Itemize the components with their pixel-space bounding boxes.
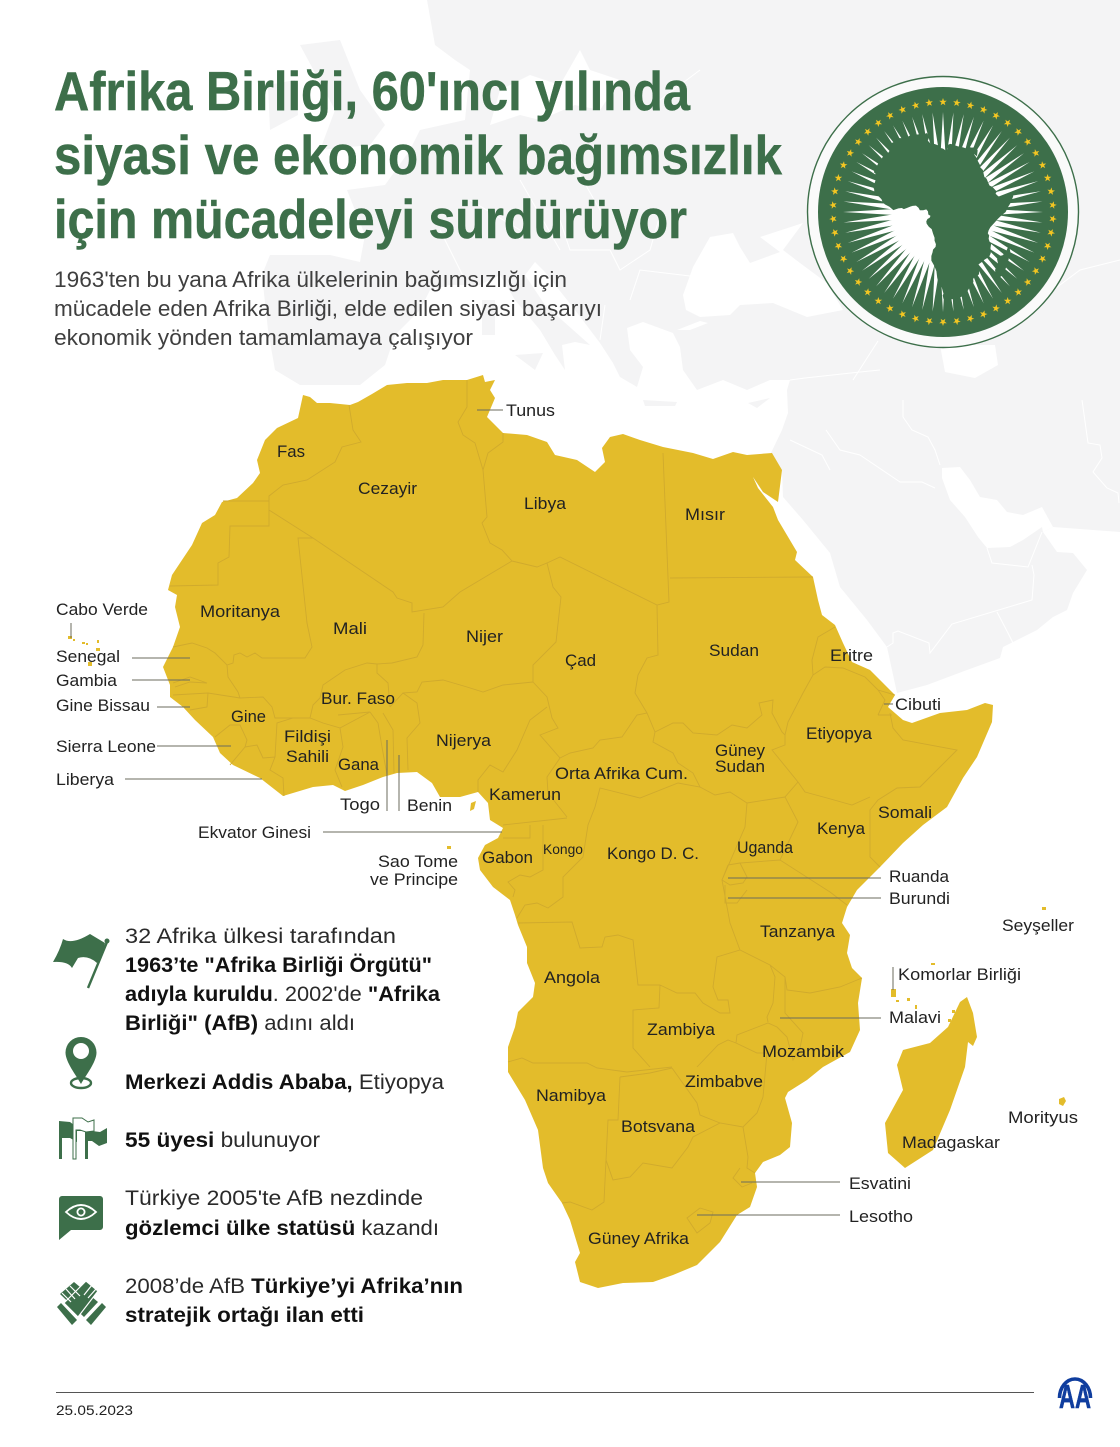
label: Sierra Leone: Sierra Leone bbox=[56, 737, 156, 756]
label: Senegal: Senegal bbox=[56, 647, 120, 666]
label: Mali: Mali bbox=[333, 619, 367, 638]
background map: Europe and Asia bbox=[262, 0, 1120, 693]
label: Burundi: Burundi bbox=[889, 889, 950, 908]
label: Morityus: Morityus bbox=[1008, 1108, 1078, 1127]
icon: three flags bbox=[59, 1118, 107, 1159]
label: Komorlar Birliği: Komorlar Birliği bbox=[898, 965, 1021, 984]
subtitle text block bbox=[54, 267, 602, 350]
fact: founding: 32 Afrika ülkesi tarafından bbox=[125, 925, 396, 948]
logo: Anadolu Agency: AA bbox=[1059, 1378, 1091, 1415]
label: Benin: Benin bbox=[407, 796, 452, 815]
Africa map bbox=[68, 375, 1066, 1288]
label: Cezayir: Cezayir bbox=[358, 479, 417, 498]
fact: founding: adıyla kuruldu . 2002'de "Afrika bbox=[125, 983, 440, 1006]
fact: founding: 1963’te "Afrika Birliği Örgütü" bbox=[125, 954, 432, 977]
label: Nijerya: Nijerya bbox=[436, 731, 492, 750]
icon: location pin bbox=[66, 1037, 96, 1088]
label: Mısır: Mısır bbox=[685, 505, 725, 524]
label: Güney Sudan bbox=[715, 741, 765, 776]
fact: Türkiye observer status bbox=[125, 1187, 439, 1240]
label: Kongo: Kongo bbox=[543, 841, 583, 857]
label: Güney Sudan: Sudan bbox=[715, 757, 765, 776]
country borders bbox=[170, 380, 957, 1233]
logo: Anadolu Agency bbox=[1059, 1378, 1091, 1415]
fact: strategic partner bbox=[125, 1275, 463, 1327]
label: Malavi: Malavi bbox=[889, 1008, 941, 1027]
label: Liberya: Liberya bbox=[56, 770, 115, 789]
label: Gambia: Gambia bbox=[56, 671, 118, 690]
label: Moritanya: Moritanya bbox=[200, 602, 281, 621]
label: Cibuti: Cibuti bbox=[895, 695, 941, 714]
label: Bur. Faso: Bur. Faso bbox=[321, 689, 395, 708]
label: Etiyopya: Etiyopya bbox=[806, 724, 873, 743]
fact: members: 55 üyesi bulunuyor bbox=[125, 1129, 320, 1152]
fact: headquarters: Merkezi Addis Ababa, Etiyopya bbox=[125, 1071, 444, 1094]
label: Sao Tome ve Principe bbox=[370, 852, 458, 889]
title: için mücadeleyi sürdürüyor bbox=[54, 188, 687, 250]
label: Angola: Angola bbox=[544, 968, 601, 987]
label: Cabo Verde: Cabo Verde bbox=[56, 600, 148, 619]
fact: Türkiye observer status: Türkiye 2005'te AfB nezdinde bbox=[125, 1187, 423, 1210]
label: Libya: Libya bbox=[524, 494, 567, 513]
fact: strategic partner: stratejik ortağı ilan etti bbox=[125, 1304, 364, 1327]
label: Somali: Somali bbox=[878, 803, 932, 822]
label: Sudan: Sudan bbox=[709, 641, 759, 660]
label: Madagaskar: Madagaskar bbox=[902, 1133, 1000, 1152]
label: Ruanda: Ruanda bbox=[889, 867, 950, 886]
label: Kongo D. C.: Kongo D. C. bbox=[607, 844, 699, 863]
African Union emblem bbox=[808, 76, 1078, 348]
label: Zambiya: Zambiya bbox=[647, 1020, 716, 1039]
label: Fas: Fas bbox=[277, 442, 305, 461]
date: 25.05.2023 bbox=[56, 1402, 133, 1418]
label: Kamerun: Kamerun bbox=[489, 785, 561, 804]
label: Çad: Çad bbox=[565, 651, 596, 670]
label: Gine Bissau: Gine Bissau bbox=[56, 696, 150, 715]
icon: flag bbox=[53, 934, 110, 988]
label: Nijer: Nijer bbox=[466, 627, 503, 646]
footer rule bbox=[56, 1392, 1034, 1394]
label: Güney Sudan: Güney bbox=[715, 741, 765, 760]
label: Esvatini: Esvatini bbox=[849, 1174, 911, 1193]
fact: founding: Birliği" (AfB) adını aldı bbox=[125, 1012, 355, 1035]
label: Eritre: Eritre bbox=[830, 646, 873, 665]
country labels bbox=[56, 401, 1078, 1248]
label: Sao Tome ve Principe: Sao Tome bbox=[378, 852, 458, 871]
leader lines bbox=[71, 410, 893, 1215]
label: Orta Afrika Cum.: Orta Afrika Cum. bbox=[555, 764, 688, 783]
label: Fildişi Sahili: Fildişi bbox=[284, 727, 331, 746]
label: Tunus: Tunus bbox=[506, 401, 555, 420]
label: Ekvator Ginesi: Ekvator Ginesi bbox=[198, 823, 311, 842]
icon: eye speech bubble bbox=[59, 1196, 103, 1240]
label: Sao Tome ve Principe: ve Principe bbox=[370, 870, 458, 889]
fact: Türkiye observer status: gözlemci ülke statüsü kazandı bbox=[125, 1217, 439, 1240]
label: Gine: Gine bbox=[231, 707, 266, 726]
label: Togo: Togo bbox=[340, 795, 380, 814]
title: siyasi ve ekonomik bağımsızlık bbox=[54, 124, 782, 186]
label: Mozambik: Mozambik bbox=[762, 1042, 845, 1061]
icon: handshake bbox=[57, 1281, 106, 1325]
label: Kenya: Kenya bbox=[817, 819, 866, 838]
subtitle text block: mücadele eden Afrika Birliği, elde edilen siyasi başarıyı bbox=[54, 296, 602, 321]
fact: founding bbox=[125, 925, 440, 1035]
label: Seyşeller: Seyşeller bbox=[1002, 916, 1074, 935]
label: Botsvana: Botsvana bbox=[621, 1117, 696, 1136]
label: Uganda: Uganda bbox=[737, 838, 794, 857]
islands bbox=[68, 636, 1066, 1106]
label: Gana: Gana bbox=[338, 755, 380, 774]
title: Afrika Birliği, 60'ıncı yılında bbox=[54, 60, 690, 122]
title bbox=[54, 60, 782, 250]
label: Fildişi Sahili: Sahili bbox=[286, 747, 329, 766]
subtitle text block: ekonomik yönden tamamlamaya çalışıyor bbox=[54, 325, 473, 350]
fact: strategic partner: 2008’de AfB Türkiye’yi Afrika’nın bbox=[125, 1275, 463, 1298]
label: Güney Afrika: Güney Afrika bbox=[588, 1229, 690, 1248]
label: Tanzanya: Tanzanya bbox=[760, 922, 836, 941]
label: Gabon: Gabon bbox=[482, 848, 533, 867]
label: Lesotho: Lesotho bbox=[849, 1207, 913, 1226]
label: Namibya: Namibya bbox=[536, 1086, 607, 1105]
subtitle text block: 1963'ten bu yana Afrika ülkelerinin bağımsızlığı için bbox=[54, 267, 567, 292]
label: Zimbabve: Zimbabve bbox=[685, 1072, 763, 1091]
label: Fildişi Sahili bbox=[284, 727, 331, 766]
